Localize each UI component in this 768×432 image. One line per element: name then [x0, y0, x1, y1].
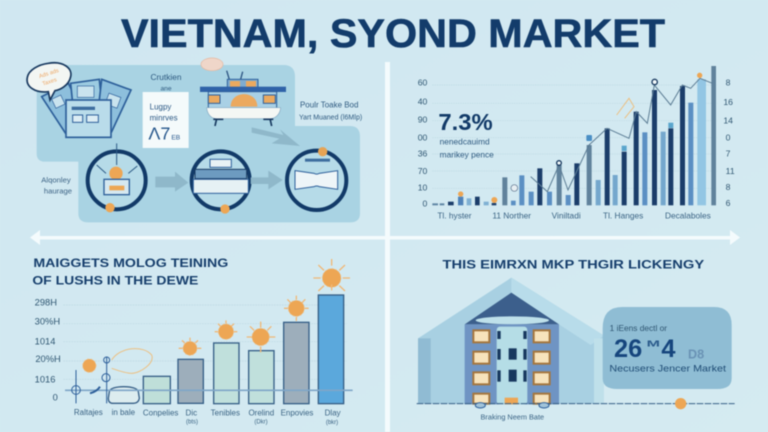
y axis labels: 1014: [35, 336, 55, 346]
x axis labels: Dic: [186, 408, 197, 417]
icon: circle centre: [192, 151, 250, 214]
callout: market stat: [603, 307, 732, 389]
y axis labels: 1016: [35, 374, 55, 384]
y axis labels: 30%H: [35, 317, 60, 327]
icon: cars: [475, 403, 549, 408]
callout: market stat: 26: [614, 335, 642, 363]
callout: white stat card: Lugpy: [150, 102, 171, 111]
right axis labels: 16: [723, 97, 733, 107]
right axis labels: 7: [726, 149, 731, 159]
text: poulr toake bod: Poulr Toake Bod: [300, 101, 358, 110]
text: aligonley hauage: Alqonley: [41, 175, 71, 184]
baseline: [65, 388, 353, 393]
arrow: centre to right: [251, 171, 283, 189]
x axis labels: Orelind: [248, 408, 274, 417]
icon: small cloud: [201, 58, 223, 71]
callout: market stat: 4: [661, 335, 675, 363]
panel: market growth chart: [418, 66, 735, 220]
x axis sublabels: (bkr): [326, 420, 338, 426]
x axis sublabels: (bts): [186, 419, 198, 425]
title: VIETNAM, SYOND MARKET: [121, 12, 665, 56]
callout: white stat card: Λ7: [148, 123, 170, 143]
heading: [32, 256, 228, 287]
sun rays: [179, 259, 350, 352]
text: crutbien: Crutkien: [150, 72, 182, 82]
y axis labels: 20%H: [35, 354, 61, 364]
text: poulr toake bod: [299, 101, 362, 121]
x axis labels: [74, 408, 341, 417]
x axis labels: Conpelies: [143, 408, 178, 417]
grid lines: [63, 305, 347, 379]
arrow: ship to right circle: [252, 127, 300, 146]
icon: circle right: [287, 147, 346, 210]
icon: speech bubble: Ads ads: [38, 68, 60, 80]
left axis labels: 36: [418, 149, 428, 159]
caption: Braking Neem Bate: [481, 413, 544, 422]
left axis labels: [418, 78, 428, 208]
icon: doodle and pins: [72, 349, 152, 403]
x axis labels: Raltajes: [74, 408, 103, 417]
text: aligonley hauage: haurage: [44, 187, 72, 196]
callout: market stat: M: [647, 339, 660, 349]
text: stat caption: [440, 137, 494, 160]
heading: OF LUSHS IN THE DEWE: [32, 273, 198, 287]
bars: [108, 295, 344, 404]
trend line: [531, 78, 712, 192]
callout: white stat card: EB: [171, 134, 181, 141]
right axis labels: 6: [726, 198, 731, 208]
left axis labels: 10: [418, 183, 428, 193]
right axis labels: 8: [726, 78, 731, 88]
x axis sublabels: [186, 419, 338, 426]
icon: orange arrow doodle: [617, 98, 634, 118]
icon: circle left: [88, 143, 146, 212]
heading: THIS EIMRXN MKP THGIR LICKENGY: [442, 257, 705, 271]
bars: [432, 66, 716, 205]
left axis labels: 0: [423, 198, 428, 208]
panel: market process: ane: [160, 86, 172, 93]
x axis sublabels: (Dkr): [254, 420, 268, 426]
left axis labels: 90: [418, 115, 428, 125]
right axis labels: 8: [726, 182, 731, 192]
left axis labels: 00: [418, 133, 428, 143]
arrow: left to centre: [155, 172, 188, 192]
callout: market stat: Necusers Jencer Market: [609, 364, 726, 374]
right axis labels: 11: [726, 166, 735, 176]
callout: white stat card: minrves: [150, 114, 178, 123]
right axis labels: [723, 78, 735, 208]
process panel background: [37, 65, 360, 222]
x axis labels: Enpovies: [281, 408, 313, 417]
icon: building: [418, 278, 604, 404]
x axis labels: Tl. Hanges: [603, 210, 643, 220]
x axis labels: Dlay: [325, 408, 341, 417]
icon: speech bubble: Taxes: [42, 77, 58, 88]
x axis labels: in bale: [112, 408, 136, 417]
icon: documents fan: [42, 79, 131, 137]
x axis labels: Viniltadi: [552, 210, 581, 220]
icon: sun on ground: [675, 398, 686, 409]
right axis labels: 14: [723, 115, 733, 125]
callout: market stat: 1 iEens dectl or: [610, 323, 667, 333]
callout: market stat: D8: [688, 347, 704, 361]
x axis labels: Tenibles: [211, 408, 240, 417]
text: stat caption: nenedcauimd: [440, 137, 490, 147]
left axis labels: 40: [418, 96, 428, 106]
heading: MAIGGETS MOLOG TEINING: [33, 256, 228, 270]
right axis labels: 0: [726, 133, 731, 143]
icon: speech bubble: [27, 63, 71, 100]
text: poulr toake bod: Yart Muaned (ǀ6Mǀp): [299, 114, 362, 121]
left axis labels: 70: [418, 166, 428, 176]
x axis labels: [437, 210, 711, 220]
text: stat caption: marikey pence: [440, 150, 494, 160]
icon: suns: [83, 269, 341, 372]
y axis labels: 298H: [35, 297, 57, 307]
x axis labels: Decalaboles: [665, 210, 711, 220]
icon: ship building: [200, 71, 286, 126]
panel: building market: [417, 257, 735, 422]
panel: bar chart with suns: [32, 256, 353, 426]
divider arrows: [30, 62, 740, 432]
y axis labels: 0: [53, 393, 58, 403]
ground line: [417, 402, 735, 405]
line markers: [458, 73, 702, 203]
stat: 7.3%: 7.3%: [438, 109, 493, 135]
x axis labels: 11 Norther: [492, 210, 531, 220]
panel: market process: [27, 58, 362, 222]
x axis labels: Tl. hyster: [437, 210, 472, 220]
grid lines: [432, 85, 717, 188]
text: aligonley hauage: [41, 175, 72, 196]
y axis labels: [35, 297, 61, 403]
callout: white stat card: [143, 92, 189, 148]
left axis labels: 60: [418, 78, 428, 88]
